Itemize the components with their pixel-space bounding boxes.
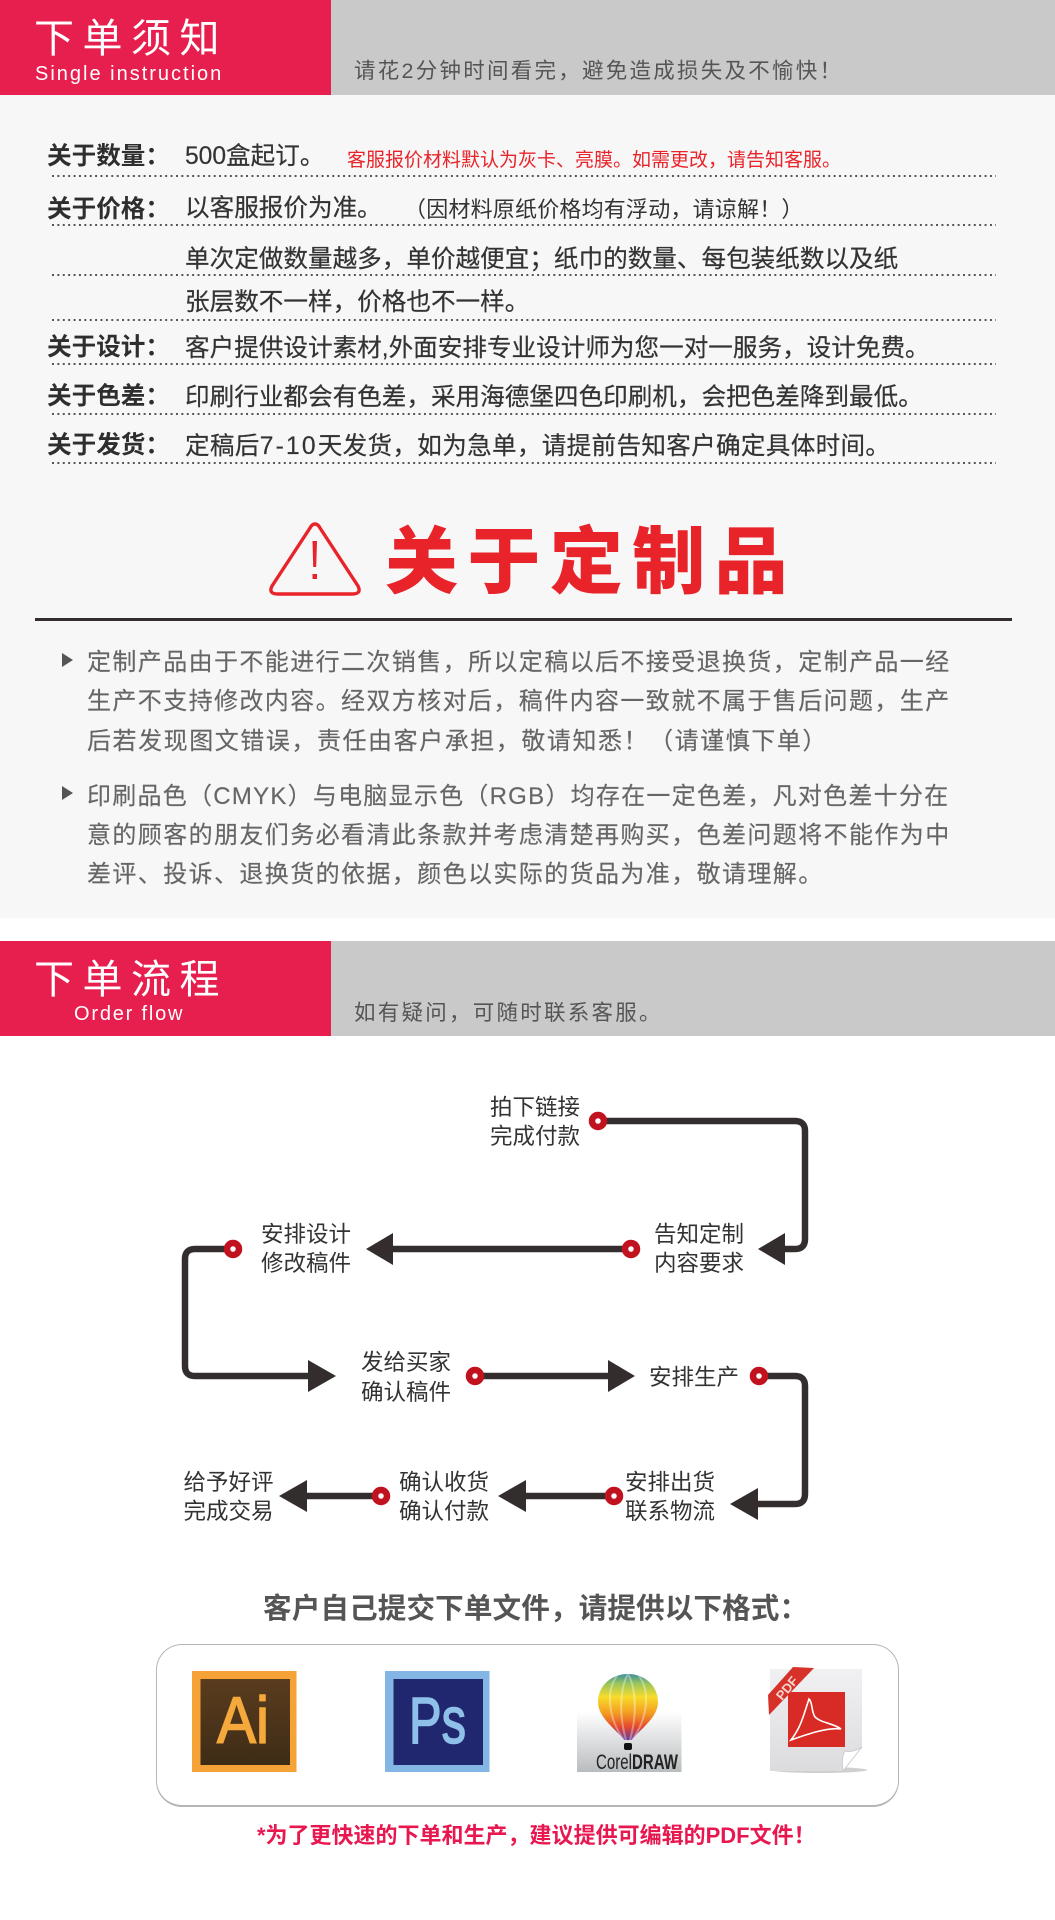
header bar: order notice	[0, 0, 1055, 95]
arrowhead 1	[758, 1233, 785, 1265]
colour text: 印刷行业都会有色差，采用海德堡四色印刷机，会把色差降到最低。	[185, 384, 923, 411]
row: quantity	[47, 143, 996, 177]
step 2 label: 内容要求	[654, 1251, 744, 1276]
panel: file formats	[156, 1644, 898, 1807]
arrow line 5	[745, 1376, 805, 1504]
quantity text: 500盒起订。	[185, 143, 324, 170]
node 7	[375, 1490, 387, 1502]
node 1	[592, 1115, 604, 1127]
price text: 以客服报价为准。	[185, 195, 382, 222]
design label: 关于设计：	[47, 334, 170, 361]
arrowhead 7	[279, 1480, 307, 1512]
step 7 label: 确认收货	[399, 1470, 489, 1495]
quantity label: 关于数量：	[47, 143, 170, 170]
node 2	[625, 1243, 637, 1255]
step 8 label: 给予好评	[184, 1470, 274, 1495]
row: shipping	[47, 432, 996, 464]
arrowhead 2	[366, 1233, 393, 1265]
paragraph: custom product returns: 后若发现图文错误，责任由客户承担，敬请知悉！（请谨慎下单）	[87, 728, 828, 754]
icon: CorelDRAW	[577, 1674, 682, 1773]
row: price	[47, 194, 996, 226]
step 6 label: 安排出货	[625, 1470, 715, 1495]
step 6 label: 联系物流	[625, 1499, 715, 1524]
icon: Adobe Photoshop	[385, 1671, 490, 1772]
icon: PDF document: PDF	[773, 1673, 801, 1703]
paragraph: colour difference policy: 意的顾客的朋友们务必看清此条款并考虑清楚再购买，色差问题将不能作为中	[87, 822, 951, 849]
design text: 客户提供设计素材,外面安排专业设计师为您一对一服务，设计免费。	[185, 335, 930, 362]
icon: Adobe Photoshop: Ps	[409, 1683, 466, 1757]
arrowhead 6	[498, 1480, 526, 1512]
header note: 请花2分钟时间看完，避免造成损失及不愉快！	[354, 59, 843, 83]
header subtitle: Single instruction	[35, 63, 223, 85]
bullet marker	[62, 653, 73, 667]
step 7 label: 确认付款	[399, 1499, 489, 1524]
formats heading: 客户自己提交下单文件，请提供以下格式：	[263, 1592, 808, 1624]
colour label: 关于色差：	[47, 383, 170, 410]
node 4	[469, 1370, 481, 1382]
formats footnote: *为了更快速的下单和生产，建议提供可编辑的PDF文件！	[257, 1823, 816, 1848]
icon: warning triangle	[269, 522, 361, 596]
arrow line 1	[598, 1121, 805, 1249]
icon: PDF document	[768, 1667, 867, 1773]
shipping text: 定稿后7-10天发货，如为急单，请提前告知客户确定具体时间。	[185, 433, 890, 460]
header red tab	[0, 941, 331, 1036]
icon: Adobe Illustrator	[192, 1671, 296, 1772]
step 5 label: 安排生产	[649, 1365, 739, 1390]
step 3 label: 安排设计	[261, 1222, 351, 1247]
bullet marker	[62, 786, 73, 800]
custom products heading: 关于定制品	[385, 522, 797, 603]
step 1 label: 拍下链接	[490, 1095, 580, 1120]
icon: Adobe Illustrator: Ai	[217, 1683, 269, 1757]
background panel: notice section	[0, 95, 1055, 918]
node 3	[227, 1243, 239, 1255]
price note: （因材料原纸价格均有浮动，请谅解！）	[404, 197, 804, 222]
shipping label: 关于发货：	[47, 432, 170, 459]
arrowhead 3	[308, 1360, 336, 1392]
arrowhead 4	[608, 1360, 635, 1392]
step 4 label: 确认稿件	[361, 1380, 451, 1405]
price detail text one: 单次定做数量越多，单价越便宜；纸巾的数量、每包装纸数以及纸	[185, 246, 898, 273]
price label: 关于价格：	[47, 196, 170, 223]
node 6	[608, 1490, 620, 1502]
arrow line 4	[475, 1373, 615, 1379]
step 1 label: 完成付款	[490, 1124, 580, 1149]
arrow line 3	[185, 1249, 315, 1376]
paragraph: colour difference policy: 差评、投诉、退换货的依据，颜色以实际的货品为准，敬请理解。	[87, 861, 824, 888]
step 3 label: 修改稿件	[261, 1251, 351, 1276]
paragraph: colour difference policy: 印刷品色（CMYK）与电脑显示色（RGB）均存在一定色差，凡对色差十分在	[87, 783, 949, 810]
header note: 如有疑问，可随时联系客服。	[354, 1001, 663, 1025]
header title: 下单流程	[34, 958, 228, 1002]
divider line	[35, 618, 1012, 621]
flow chart	[182, 1095, 808, 1524]
node 5	[753, 1370, 765, 1382]
paragraph: custom product returns: 定制产品由于不能进行二次销售，所以定稿以后不接受退换货，定制产品一经	[87, 648, 951, 676]
header bar: order flow	[0, 941, 1055, 1036]
paragraph: custom product returns: 生产不支持修改内容。经双方核对后，稿件内容一致就不属于售后问题，生产	[87, 688, 951, 715]
step 2 label: 告知定制	[654, 1222, 744, 1247]
quantity red note: 客服报价材料默认为灰卡、亮膜。如需更改，请告知客服。	[347, 150, 841, 171]
row: design	[47, 334, 996, 365]
arrowhead 5	[730, 1488, 758, 1520]
header title: 下单须知	[34, 17, 228, 61]
arrow line 2	[380, 1246, 631, 1252]
step 4 label: 发给买家	[361, 1350, 451, 1375]
arrow line 6	[515, 1493, 614, 1499]
paragraph: colour difference policy	[62, 783, 951, 888]
row: colour difference	[47, 382, 996, 415]
price detail text two: 张层数不一样，价格也不一样。	[185, 289, 529, 316]
arrow line 7	[295, 1493, 380, 1499]
paragraph: custom product returns	[62, 648, 951, 754]
step 8 label: 完成交易	[184, 1499, 274, 1524]
header subtitle: Order flow	[74, 1003, 184, 1025]
header red tab	[0, 0, 331, 95]
